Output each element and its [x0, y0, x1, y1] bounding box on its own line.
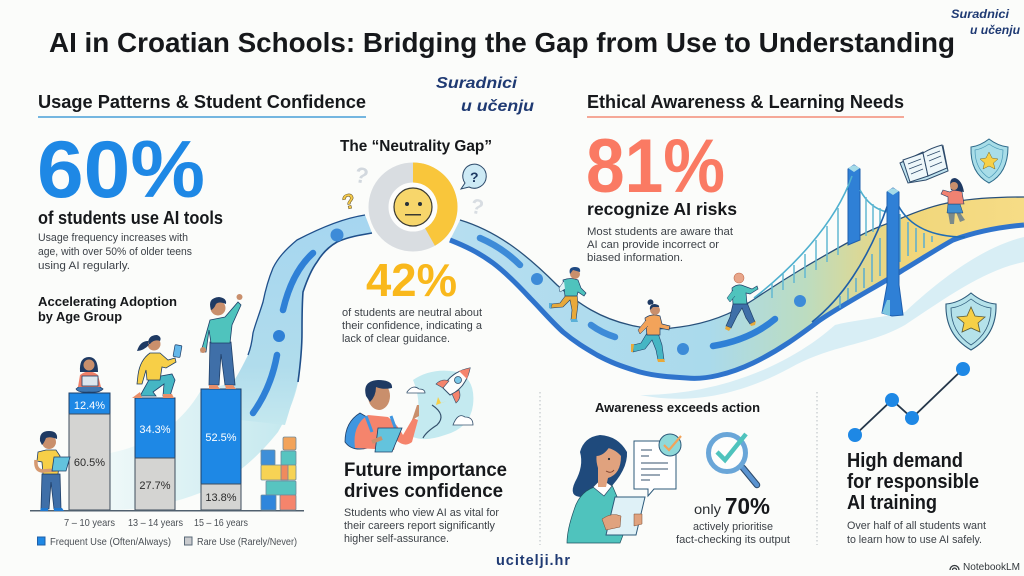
- text block: future importance: higher self-assurance.: [344, 533, 449, 545]
- text block: future importance: Future importance: [344, 460, 507, 481]
- stacked bar chart: [30, 389, 304, 548]
- bar: 15-16 years: 13.8%: [205, 492, 237, 504]
- pale swoosh: right: [640, 237, 1024, 399]
- text block: future importance: [344, 460, 507, 545]
- axis labels: [64, 517, 248, 529]
- heading: accelerating adoption: by Age Group: [38, 309, 122, 324]
- figure: runner 3: [725, 273, 758, 331]
- heading: neutrality gap: The “Neutrality Gap”: [340, 138, 492, 155]
- bar: 15-16 years: [201, 389, 241, 510]
- figure: girl on bridge: [941, 178, 965, 224]
- text block: high demand: AI training: [847, 492, 937, 514]
- donut chart: 42% neutral: [378, 172, 448, 242]
- axis labels: 13 – 14 years: [128, 517, 183, 529]
- icon: stacked blocks: [261, 437, 296, 510]
- watermark: top right: [951, 9, 1020, 37]
- stat: only 70%: actively prioritise: [693, 521, 773, 533]
- text block: high demand: [847, 450, 987, 546]
- bar: 7-10 years: 12.4%: [74, 400, 105, 412]
- stat: only 70%: 70%: [725, 493, 770, 519]
- stat: 60%: 60%: [37, 125, 205, 215]
- stat: 60%: using AI regularly.: [38, 260, 130, 272]
- stat: only 70%: fact-checking its output: [676, 534, 791, 546]
- legend: Rare Use (Rarely/Never): [197, 537, 297, 548]
- legend: [38, 537, 297, 548]
- line chart: rising demand: [848, 362, 970, 442]
- illustration: woman with document: [567, 435, 645, 543]
- student: [345, 380, 419, 452]
- figure: runner 1: [549, 267, 586, 322]
- axis labels: 15 – 16 years: [194, 517, 248, 529]
- stat: 81%: Most students are aware that: [587, 226, 734, 238]
- axis line: [30, 510, 304, 512]
- icons: question marks: ?: [353, 162, 370, 189]
- bridge: [754, 165, 965, 322]
- front tower: [882, 188, 903, 316]
- stat: only 70%: only: [694, 501, 721, 517]
- watermark: centre: [436, 75, 534, 115]
- stat: 42%: of students are neutral about: [342, 307, 483, 319]
- text block: future importance: drives confidence: [344, 481, 503, 502]
- text block: high demand: High demand: [847, 450, 963, 472]
- icon: open book: [900, 145, 948, 183]
- pale swoosh: left: [110, 382, 298, 510]
- stat: 81%: recognize AI risks: [587, 199, 737, 219]
- road: right section and bridge deck: [450, 197, 1024, 378]
- road markings: left: [253, 228, 344, 413]
- rear tower: [848, 165, 860, 245]
- watermark: top right: Suradnici: [951, 9, 1010, 21]
- heading: ethical awareness: Ethical Awareness & Learning Needs: [587, 91, 904, 112]
- figure: kneeling girl with phone: [132, 335, 182, 398]
- stat: 42%: 42%: [366, 254, 457, 306]
- figure: runner 2: [631, 299, 670, 362]
- footer: NotebookLM logo: NotebookLM: [963, 561, 1020, 573]
- heading: accelerating adoption: [38, 294, 177, 324]
- bar: 13-14 years: 34.3%: [139, 424, 171, 436]
- icon: document with check: [634, 434, 681, 496]
- stat: 42%: lack of clear guidance.: [342, 333, 450, 345]
- stat: 60%: Usage frequency increases with: [38, 232, 188, 244]
- icon: shield small: [971, 139, 1008, 183]
- figure: boy with tablet: [36, 431, 70, 511]
- stat: 81%: AI can provide incorrect or: [587, 239, 719, 251]
- icon: shield large: [946, 293, 996, 350]
- footer: ucitelji.hr: ucitelji.hr: [496, 553, 570, 569]
- road: left section: [233, 215, 372, 425]
- road markings: right: [480, 238, 806, 355]
- legend: Frequent Use (Often/Always): [50, 537, 171, 548]
- figure: standing boy reaching up: [200, 294, 242, 389]
- text block: future importance: Students who view AI as vital for: [344, 507, 499, 519]
- stat: 60%: age, with over 50% of older teens: [38, 246, 192, 258]
- stat: 42%: their confidence, indicating a: [342, 320, 483, 332]
- watermark: centre: u učenju: [461, 98, 534, 115]
- figure: girl sitting with laptop: [76, 357, 103, 392]
- bar: 7-10 years: [69, 393, 110, 510]
- icon: magnifier with check: [708, 434, 757, 485]
- watermark: centre: Suradnici: [436, 75, 518, 92]
- stat: 60%: [37, 125, 223, 272]
- title: AI in Croatian Schools: Bridging the Gap from Use to Understanding: [49, 27, 955, 58]
- stat: 60%: of students use AI tools: [38, 207, 223, 228]
- bar: 13-14 years: [135, 398, 175, 510]
- rocket: [436, 368, 470, 405]
- stat: only 70%: [676, 493, 791, 546]
- watermark: top right: u učenju: [970, 25, 1020, 37]
- icons: question marks: ?: [340, 189, 358, 215]
- bar: 7-10 years: 60.5%: [74, 457, 105, 469]
- text block: high demand: for responsible: [847, 471, 979, 493]
- icons: question marks: [340, 162, 486, 220]
- cables: [754, 176, 965, 322]
- stat: 81%: biased information.: [587, 252, 683, 264]
- heading: awareness exceeds action: Awareness exceeds action: [595, 401, 760, 415]
- heading: accelerating adoption: Accelerating Adoption: [38, 294, 177, 309]
- stat: 81%: [586, 124, 737, 264]
- text block: high demand: Over half of all students want: [847, 520, 987, 532]
- heading: usage patterns: Usage Patterns & Student Confidence: [38, 91, 366, 112]
- icon: neutral face: [394, 188, 432, 226]
- icons: question marks: ?: [470, 169, 479, 185]
- text block: future importance: their careers report significantly: [344, 520, 495, 532]
- bar: 13-14 years: 27.7%: [139, 480, 171, 492]
- stat: 42%: [342, 254, 483, 345]
- illustration: student with rocket: [345, 368, 473, 452]
- icons: question marks: ?: [469, 195, 485, 220]
- text block: high demand: to learn how to use AI safely.: [847, 534, 982, 546]
- axis labels: 7 – 10 years: [64, 517, 115, 529]
- stat: 81%: 81%: [586, 124, 725, 209]
- bar: 15-16 years: 52.5%: [205, 432, 237, 444]
